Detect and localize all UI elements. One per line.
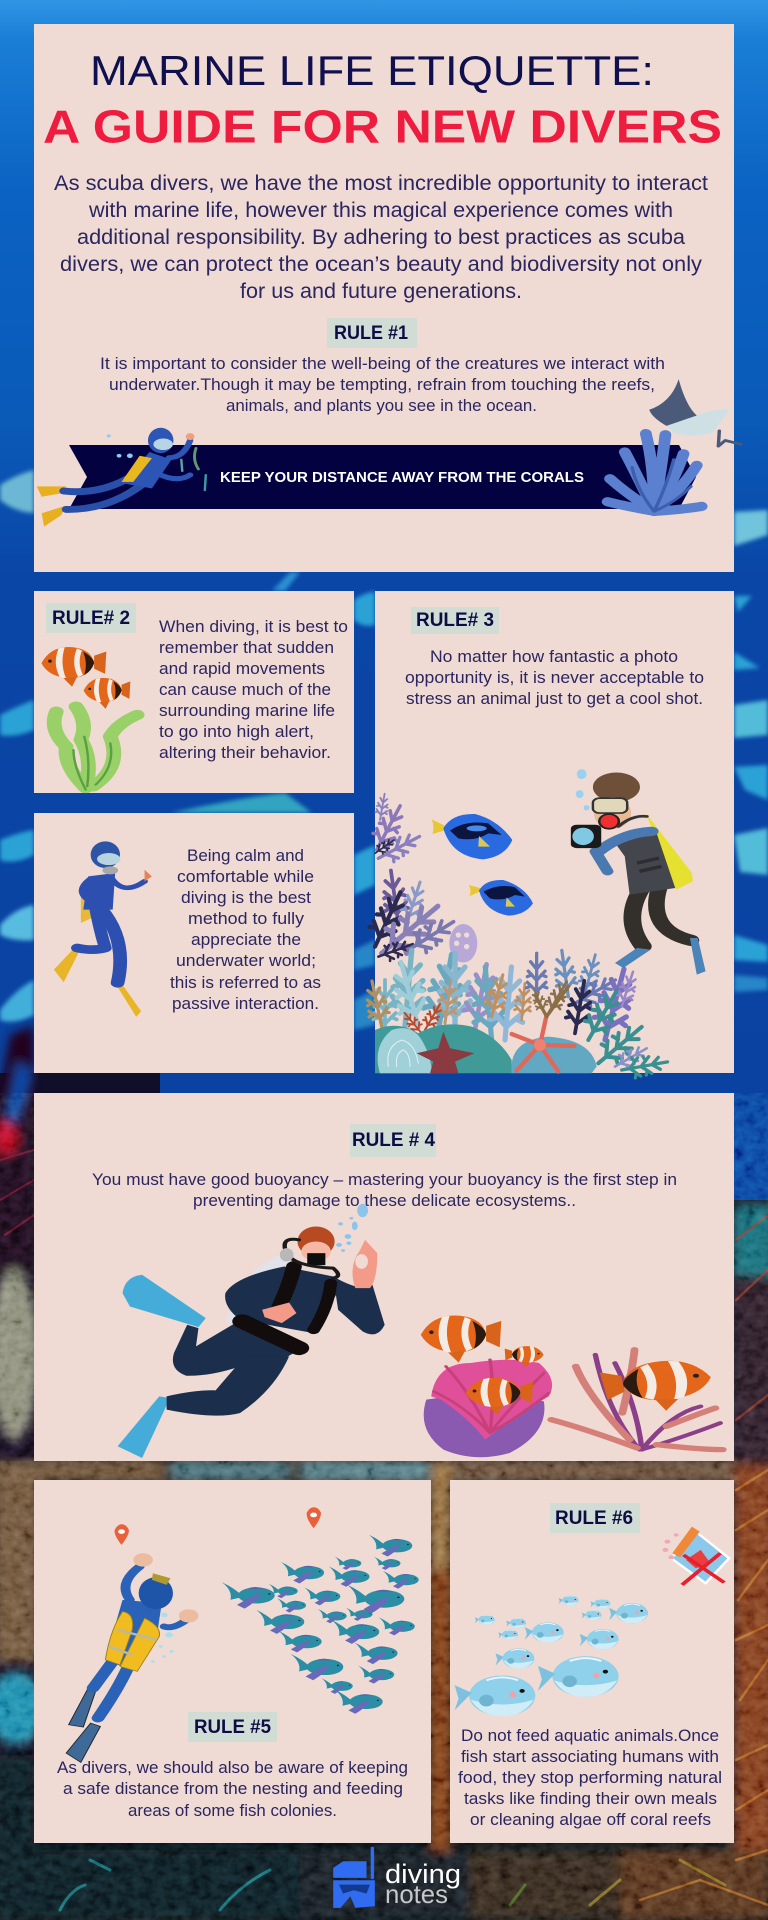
title [43, 47, 722, 152]
rule 5 text: areas of some fish colonies. [128, 1802, 337, 1820]
icon: blue tang fish [432, 814, 533, 916]
icon: clownfish on coral [551, 1350, 723, 1450]
rule 6 text: fish start associating humans with [461, 1748, 719, 1766]
rule 6 text: tasks like finding their own meals [464, 1790, 717, 1808]
rule 3 text [405, 648, 704, 708]
icon: school of fish [222, 1535, 419, 1714]
panel: rule 4 [34, 1093, 734, 1461]
banner [69, 445, 696, 509]
rule 6 text: food, they stop performing natural [458, 1769, 722, 1787]
intro text: divers, we can protect the ocean’s beauty and biodiversity not only [60, 253, 703, 276]
rule 1 text: animals, and plants you see in the ocean. [226, 397, 537, 415]
rule 4 tag [350, 1124, 436, 1157]
rule 1 text [100, 355, 665, 415]
passive interaction text: diving is the best [181, 889, 311, 907]
rule 2 text: altering their behavior. [159, 744, 331, 762]
rule 1 text: It is important to consider the well-being of the creatures we interact with [100, 355, 665, 373]
rule 2 text: surrounding marine life [159, 702, 335, 720]
rule 1 tag [327, 318, 417, 348]
rule 2 text [159, 618, 348, 762]
logo [333, 1848, 461, 1909]
passive interaction text: underwater world; [176, 952, 316, 970]
passive interaction text: comfortable while [177, 868, 314, 886]
rule 2 text: and rapid movements [159, 660, 325, 678]
rule 3 tag: RULE# 3 [416, 610, 494, 631]
title: A GUIDE FOR NEW DIVERS [43, 100, 722, 152]
passive interaction text: Being calm and [187, 847, 304, 865]
icon: diver rule 1 [37, 428, 206, 527]
panel: rule 6 [450, 1480, 734, 1843]
icon: blue coral [608, 434, 702, 511]
rule 1 text: underwater.Though it may be tempting, refrain from touching the reefs, [109, 376, 655, 394]
icon: clownfish and seaweed [41, 647, 137, 790]
rule 5 text: a safe distance from the nesting and feeding [63, 1780, 403, 1798]
rule 4 tag: RULE # 4 [352, 1130, 435, 1151]
rule 5 tag [188, 1712, 277, 1742]
rule 6 text [458, 1727, 722, 1829]
rule 3 text: stress an animal just to get a cool shot. [406, 690, 703, 708]
rule 3 text: No matter how fantastic a photo [430, 648, 678, 666]
panel: rule 5 [34, 1480, 431, 1843]
rule 2 text: When diving, it is best to [159, 618, 348, 636]
rule 1 tag: RULE #1 [334, 323, 408, 344]
panel: intro and rule 1 [34, 24, 734, 572]
rule 2 tag [46, 603, 136, 633]
rule 5 text [57, 1759, 408, 1820]
icon: location pins [115, 1507, 321, 1545]
rule 5 tag: RULE #5 [194, 1717, 271, 1738]
rule 2 tag: RULE# 2 [52, 608, 130, 629]
rule 5 text: As divers, we should also be aware of keeping [57, 1759, 408, 1777]
intro text: additional responsibility. By adhering to best practices as scuba [77, 226, 685, 249]
logo: diving [385, 1859, 461, 1889]
banner: KEEP YOUR DISTANCE AWAY FROM THE CORALS [220, 470, 584, 486]
icon: clownfish on anemone [421, 1315, 552, 1457]
icon: diver from above [66, 1553, 198, 1762]
icon: diver standing [54, 841, 152, 1017]
icon: pufferfish [455, 1596, 648, 1716]
rule 4 text [92, 1171, 677, 1210]
icon: coral reef [362, 793, 669, 1080]
icon: photographer diver [571, 769, 706, 975]
rule 6 tag: RULE #6 [555, 1508, 633, 1529]
rule 3 tag [411, 607, 499, 634]
icon: diver ok sign [118, 1204, 385, 1458]
intro text: for us and future generations. [240, 280, 522, 303]
rule 6 text: Do not feed aquatic animals.Once [461, 1727, 719, 1745]
passive interaction text: this is referred to as [170, 974, 321, 992]
passive interaction text: appreciate the [191, 931, 301, 949]
rule 4 text: You must have good buoyancy – mastering your buoyancy is the first step in [92, 1171, 677, 1189]
logo: notes [385, 1879, 448, 1909]
passive interaction text: passive interaction. [172, 995, 319, 1013]
passive interaction text: method to fully [188, 910, 305, 928]
icon: manta ray [649, 379, 741, 446]
panel: rule 3 [375, 591, 734, 1073]
title: MARINE LIFE ETIQUETTE: [90, 47, 654, 94]
intro text: with marine life, however this magical experience comes with [88, 199, 673, 222]
passive interaction text [170, 847, 321, 1013]
icon: no feeding [662, 1527, 729, 1585]
intro text [54, 172, 708, 303]
rule 3 text: opportunity is, it is never acceptable to [405, 669, 704, 687]
rule 2 text: to go into high alert, [159, 723, 314, 741]
panel: rule 2 [34, 591, 354, 793]
panel: passive interaction [34, 813, 354, 1073]
intro text: As scuba divers, we have the most incredible opportunity to interact [54, 172, 708, 195]
rule 6 text: or cleaning algae off coral reefs [470, 1811, 711, 1829]
rule 4 text: preventing damage to these delicate ecosystems.. [193, 1192, 576, 1210]
rule 6 tag [550, 1503, 640, 1533]
rule 2 text: remember that sudden [159, 639, 334, 657]
rule 2 text: can cause much of the [159, 681, 331, 699]
